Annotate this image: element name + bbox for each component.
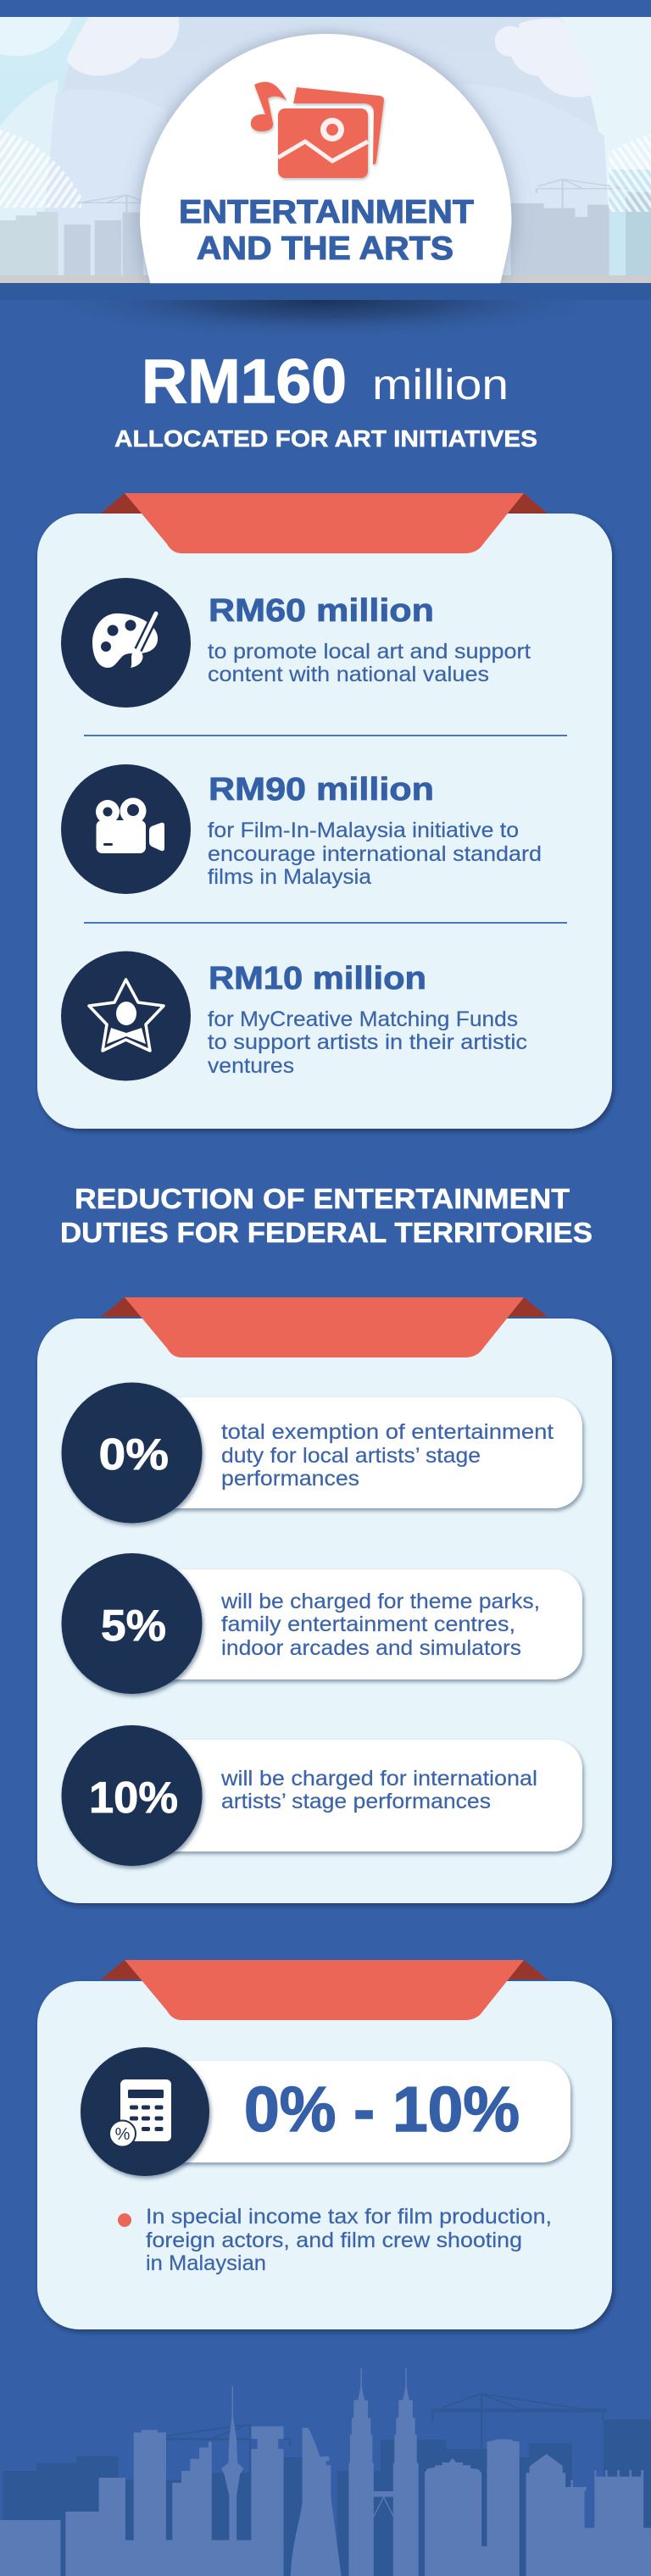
item: RM10 million: RM10 million: [209, 961, 426, 997]
icon: music and pictures: [251, 82, 384, 178]
item: 0 percent: duty for local artists’ stage: [221, 1444, 481, 1468]
top bar: [0, 0, 651, 17]
item: RM60 million: content with national values: [208, 663, 489, 686]
ribbon: [125, 493, 524, 553]
item: 0 percent: 0%: [98, 1430, 169, 1480]
item: RM10 million: for MyCreative Matching Funds: [208, 1008, 518, 1031]
item: RM90 million: RM90 million: [209, 772, 434, 808]
description: foreign actors, and film crew shooting: [146, 2229, 522, 2252]
item: RM90 million: [61, 764, 542, 894]
item: RM90 million: for Film-In-Malaysia initiative to: [208, 819, 519, 842]
rate circle: [81, 2047, 209, 2176]
floor shadow: [27, 300, 620, 341]
ground band and shadow: [0, 283, 651, 300]
icon: palette: [92, 613, 158, 668]
item: 10 percent: [61, 1725, 582, 1866]
item: 10 percent: artists’ stage performances: [221, 1790, 491, 1813]
title text: ENTERTAINMENT: [179, 194, 474, 230]
subheading: allocated: ALLOCATED FOR ART INITIATIVES: [114, 425, 537, 452]
panel: special income tax: [37, 1960, 612, 2329]
description: [146, 2205, 552, 2275]
rate text: 0% - 10%: [244, 2074, 520, 2145]
item: 0 percent: total exemption of entertainment: [221, 1420, 554, 1444]
item: 5 percent: indoor arcades and simulators: [221, 1636, 521, 1660]
item: 0 percent: performances: [221, 1467, 359, 1491]
item: RM90 million: encourage international standard: [208, 842, 542, 866]
icon: calculator: [109, 2079, 171, 2147]
skyline: [0, 2368, 651, 2576]
title text: [179, 194, 474, 267]
rate pill: [140, 2061, 570, 2162]
back buildings: [3, 2419, 651, 2576]
item: 5 percent: will be charged for theme parks,: [220, 1590, 540, 1613]
item: RM10 million: ventures: [208, 1054, 294, 1078]
panel: art initiatives: [37, 493, 612, 1129]
icon: calculator: %: [115, 2125, 131, 2144]
item: 10 percent: will be charged for international: [220, 1767, 537, 1790]
description: In special income tax for film production,: [146, 2205, 552, 2229]
item: 5 percent: family entertainment centres,: [221, 1613, 515, 1636]
ribbon: [125, 1960, 524, 2020]
card: [37, 1981, 612, 2329]
bullet: [118, 2213, 131, 2227]
ribbon back folds: [101, 493, 548, 514]
cranes: [166, 2394, 607, 2457]
ribbon back folds: [101, 1960, 548, 1979]
front buildings: [0, 2386, 284, 2576]
heading: reduction of entertainment duties: DUTIES FOR FEDERAL TERRITORIES: [60, 1217, 593, 1248]
header illustration: [0, 17, 651, 300]
title medallion: [140, 34, 511, 283]
headline: RM160 million: RM160: [142, 347, 347, 416]
icon: star performer: [89, 980, 164, 1051]
headline: RM160 million: million: [372, 361, 509, 408]
item: 0 percent: [61, 1383, 582, 1524]
item: 5 percent: 5%: [101, 1602, 166, 1651]
item: 10 percent: 10%: [89, 1774, 178, 1823]
item: RM60 million: to promote local art and support: [208, 640, 531, 663]
ribbon: [125, 1297, 524, 1357]
item: RM10 million: [61, 951, 527, 1081]
ribbon back folds: [101, 1297, 548, 1317]
title text: AND THE ARTS: [197, 230, 453, 267]
headline: RM160 million: [142, 347, 509, 416]
item: RM60 million: [61, 578, 531, 708]
item: 5 percent: [61, 1553, 582, 1694]
icon: film camera: [96, 798, 164, 853]
item: RM10 million: to support artists in their artistic: [208, 1030, 527, 1054]
description: in Malaysian: [146, 2251, 266, 2275]
heading: reduction of entertainment duties: [60, 1183, 593, 1248]
item: RM90 million: films in Malaysia: [208, 865, 371, 889]
card: [37, 514, 612, 1129]
panel: entertainment duties: [37, 1297, 612, 1903]
item: RM60 million: RM60 million: [209, 593, 434, 629]
heading: reduction of entertainment duties: REDUCTION OF ENTERTAINMENT: [75, 1183, 570, 1214]
card: [37, 1319, 612, 1903]
